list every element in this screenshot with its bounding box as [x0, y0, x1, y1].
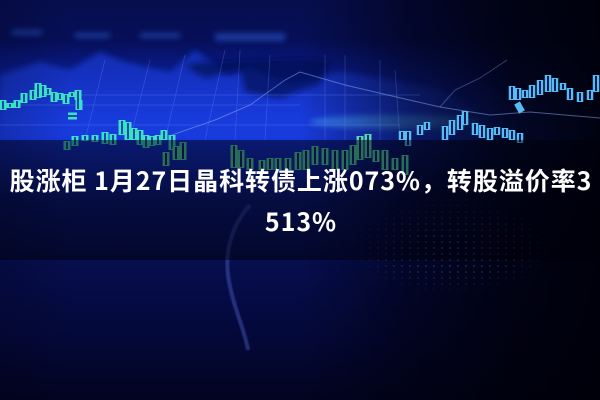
title: 股涨柜 1月27日晶科转债上涨073%，转股溢价率3: [10, 162, 592, 198]
candlesticks: green left: [3, 83, 172, 150]
title: 513%: [265, 203, 337, 239]
blue mountain area: [0, 50, 500, 140]
trend line: [172, 72, 600, 135]
dark title band: [0, 140, 600, 260]
candlesticks: center teal: [166, 134, 405, 175]
faint top streaks: [12, 30, 285, 41]
candlesticks: blue right: [402, 75, 596, 146]
grid lines: [0, 50, 420, 140]
title: [10, 162, 592, 239]
globe dots: [362, 206, 538, 290]
globe arc: [227, 205, 250, 350]
horizon glow: [310, 115, 480, 129]
